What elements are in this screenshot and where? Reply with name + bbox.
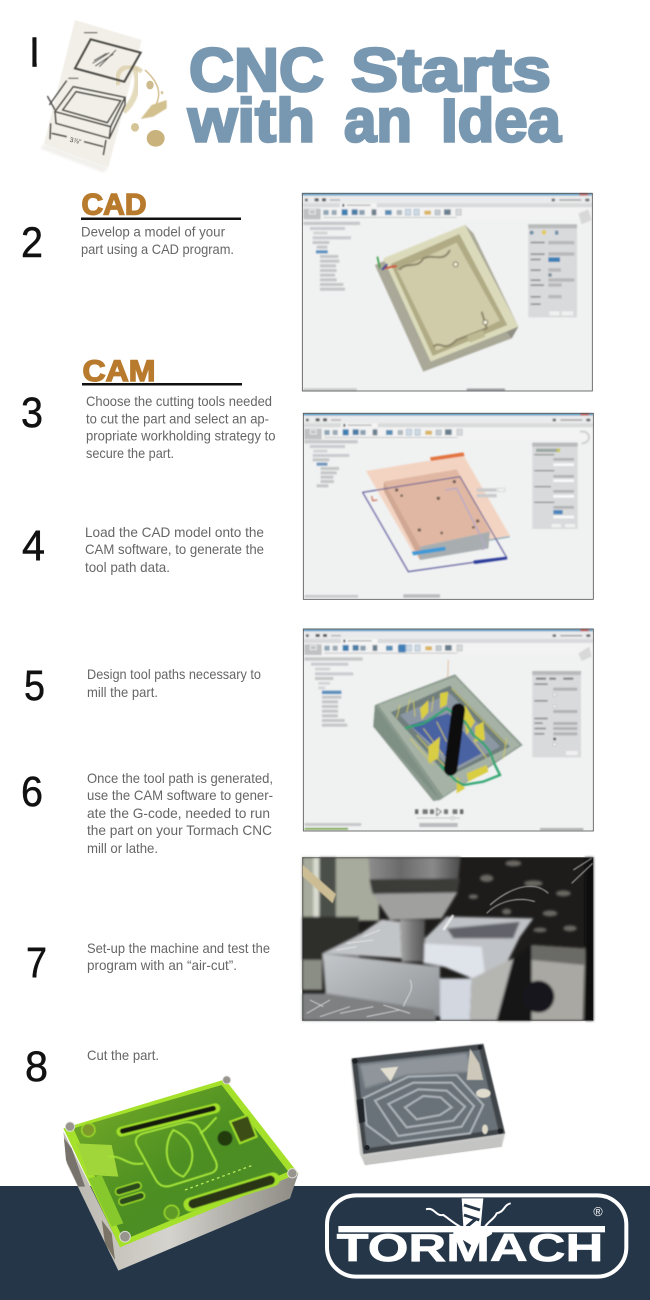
step 4 text: Load the CAD model onto the — [85, 524, 264, 540]
screenshot: CAM setup — [303, 413, 593, 599]
footer band — [0, 1186, 650, 1300]
step 6 text: the part on your Tormach CNC — [87, 822, 272, 838]
title: with — [187, 86, 315, 154]
step 6 text: mill or lathe. — [87, 840, 158, 856]
registered mark: ® — [593, 1205, 603, 1219]
step 5 text: Design tool paths necessary to — [87, 666, 261, 682]
step 6 text: ate the G-code, needed to run — [87, 805, 270, 821]
step 3 text: secure the part. — [86, 445, 174, 461]
screenshot: tool paths — [303, 629, 593, 831]
step 6 text: use the CAM software to gener- — [87, 787, 273, 803]
step 4 text: CAM software, to generate the — [85, 541, 264, 557]
step 7 number: 7 — [26, 939, 47, 987]
step 4 text: tool path data. — [85, 559, 170, 575]
step 3 text — [86, 393, 276, 461]
step 4 text — [85, 524, 264, 575]
step 3 number: 3 — [21, 389, 43, 437]
title: an — [344, 86, 412, 154]
step 1 number: 1 — [22, 29, 46, 77]
title: Idea — [441, 86, 562, 154]
title — [187, 36, 562, 154]
title: Starts — [351, 36, 551, 104]
step 3 text: to cut the part and select an ap- — [86, 410, 269, 426]
step 8 text: Cut the part. — [87, 1047, 159, 1063]
playback controls — [415, 808, 463, 827]
sketch linework — [47, 33, 141, 155]
settings panel — [528, 224, 577, 317]
step 5 number: 5 — [24, 662, 45, 710]
title: CNC — [189, 36, 324, 104]
heading: CAM: CAM — [82, 355, 156, 388]
photo: finished enclosure with green lid — [63, 1076, 298, 1271]
heights panel — [532, 443, 578, 529]
drill bit — [462, 1198, 483, 1238]
icon: hand sketch on stained paper — [40, 20, 167, 173]
step 7 text — [87, 940, 270, 973]
heading: CAD: CAD — [82, 188, 146, 222]
stock planes and part — [363, 452, 510, 572]
model browser tree — [303, 222, 360, 291]
display settings panel — [532, 671, 581, 757]
step 2 text: Develop a model of your — [81, 224, 225, 240]
wordmark: TORMACH — [337, 1227, 603, 1270]
logo: Tormach — [327, 1195, 626, 1277]
step 5 text: mill the part. — [87, 684, 158, 700]
operations tree — [304, 657, 363, 727]
step 6 number: 6 — [21, 768, 43, 816]
step 7 text: program with an “air-cut”. — [87, 957, 237, 973]
CAD part — [375, 225, 518, 372]
step 6 text — [87, 770, 273, 856]
step 8 number: 8 — [25, 1043, 48, 1091]
coffee stains — [117, 67, 167, 147]
browser tree — [304, 440, 358, 487]
step 7 text: Set-up the machine and test the — [87, 940, 270, 956]
part with coloured tool paths — [373, 660, 523, 801]
step 3 text: Choose the cutting tools needed — [86, 393, 272, 409]
step 2 number: 2 — [21, 219, 43, 267]
step 2 text — [81, 224, 234, 257]
metal chips — [426, 1203, 511, 1227]
screenshot: CAD model — [302, 193, 592, 391]
step 4 number: 4 — [22, 522, 45, 570]
icon: hand sketch on stained paper: 3⅞" — [69, 137, 82, 146]
step 6 text: Once the tool path is generated, — [87, 770, 273, 786]
photo: milling in progress — [302, 857, 593, 1021]
step 5 text — [87, 666, 261, 700]
photo: machined part — [351, 1043, 505, 1165]
step 3 text: propriate workholding strategy to — [86, 428, 276, 444]
step 2 text: part using a CAD program. — [81, 241, 234, 257]
